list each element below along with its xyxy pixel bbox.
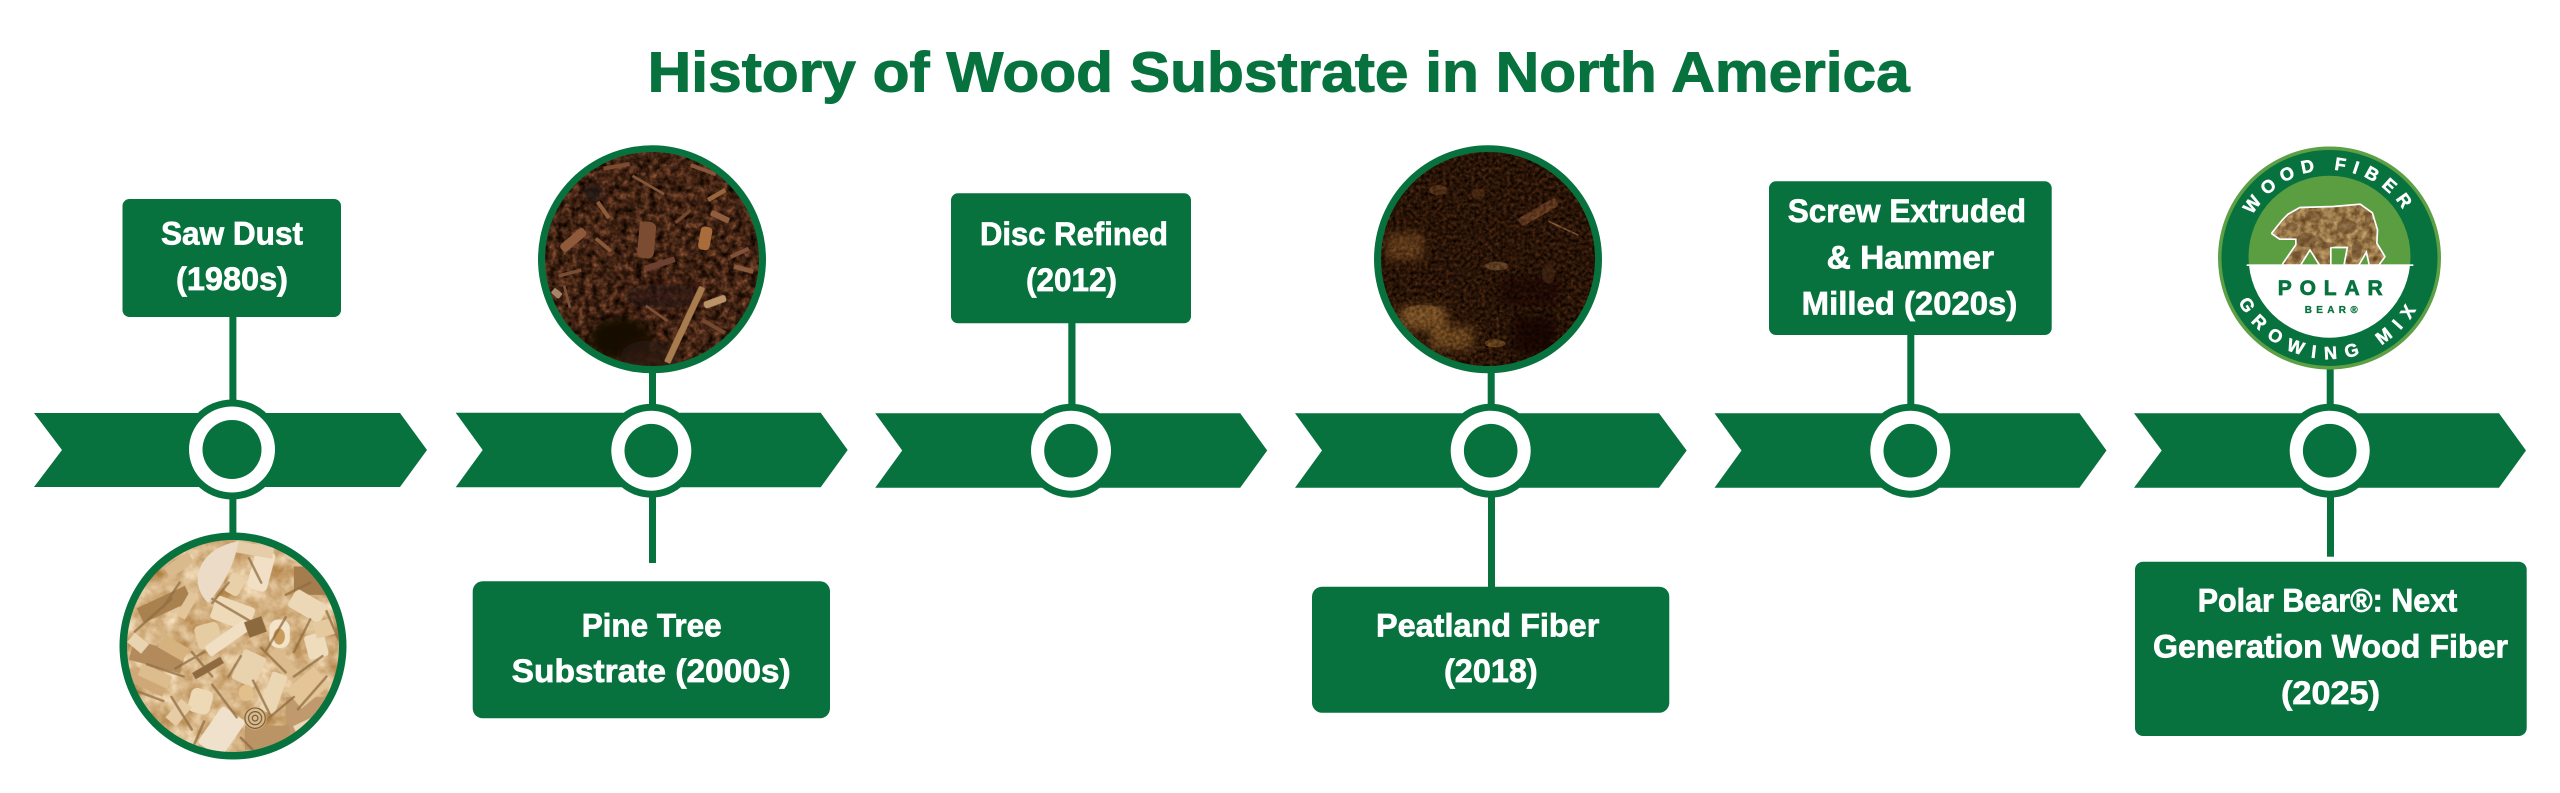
label box: (1980s) [176,261,288,297]
photo: pine bark mulch [538,145,766,373]
label box [473,581,830,718]
timeline node [604,404,698,498]
arrow ribbon [456,413,848,487]
ring text: WOOD FIBER [2242,157,2412,213]
label box: Polar Bear®: Next [2198,583,2458,619]
milestone: Disc Refined [875,193,1267,498]
shavings shadow lines [131,558,339,750]
logo: Polar Bear Growing Mix [2218,146,2441,370]
label box [951,193,1191,323]
label box [1769,181,2052,335]
timeline node [1024,404,1118,498]
label box: (2025) [2281,675,2380,711]
arrow ribbon [2134,413,2526,488]
label box: Peatland Fiber [1376,608,1599,644]
milestone: Peatland Fiber [1295,145,1687,713]
milestone: Polar Bear [2134,146,2527,736]
connector stems [229,317,236,536]
timeline node [2283,404,2377,498]
logo: Polar Bear Growing Mix: GROWING MIX [2240,298,2416,360]
label box [1312,587,1669,713]
label box: Saw Dust [161,216,303,252]
title: History of Wood Substrate in North America [648,41,1911,105]
connector stem [1907,335,1914,408]
timeline node [1444,404,1538,498]
arrow ribbon [875,413,1267,488]
label box: Substrate (2000s) [512,653,791,689]
label box: Pine Tree [582,608,722,644]
icon: bear [2247,205,2413,266]
wordmark: POLAR [2278,277,2383,300]
timeline node [1863,404,1957,498]
label box: (2018) [1444,653,1538,689]
label box: Generation Wood Fiber [2153,629,2508,665]
logo: Polar Bear Growing Mix: BEAR® [2305,305,2358,316]
arrow ribbon [34,413,427,487]
label box: Milled (2020s) [1802,286,2017,322]
label box: Disc Refined [980,216,1168,252]
photo: wood shavings [120,532,346,760]
label box [122,199,341,317]
arrow ribbon [1295,413,1687,488]
label box: (2012) [1026,262,1117,298]
photo: peat [1374,145,1602,373]
milestone: Pine Tree Substrate [456,145,848,718]
timeline node [182,400,282,500]
label box [2135,562,2527,736]
connector stems [1488,370,1495,588]
connector stem [1068,323,1076,408]
milestone: Saw Dust [34,199,427,760]
connector stems [649,370,656,563]
connector stems [2327,367,2334,557]
label box: & Hammer [1827,240,1994,276]
arrow ribbon [1714,413,2106,488]
label box: Screw Extruded [1788,193,2026,229]
milestone: Screw Extruded and Hammer Milled [1714,181,2106,498]
